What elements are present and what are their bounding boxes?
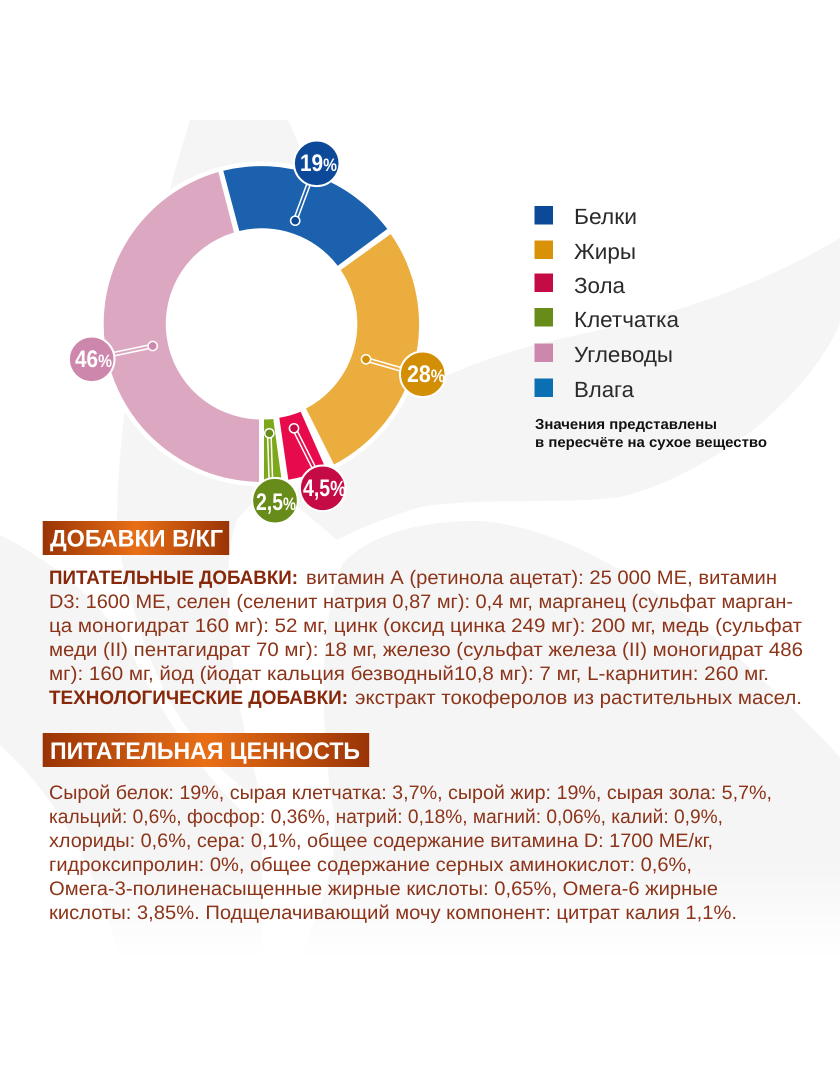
legend item: Углеводы: Углеводы xyxy=(574,342,673,367)
legend item: Зола: Зола xyxy=(574,273,626,298)
background swoosh shapes xyxy=(0,120,840,960)
callout: 46% xyxy=(69,336,157,382)
callout: 2,5%: 2,5% xyxy=(256,489,296,516)
text block: nutritional value: Сырой белок: 19%, сырая клетчатка: 3,7%, сырой жир: 19%, сырая зола: 5,7%, xyxy=(49,782,772,804)
text block: nutritional value: кислоты: 3,85%. Подщелачивающий мочу компонент: цитрат калия 1,1%. xyxy=(49,902,737,924)
legend item: Белки xyxy=(534,204,637,229)
text block: additives: меди (II) пентагидрат 70 мг): 18 мг, железо (сульфат железа (II) моногидрат 486 xyxy=(49,639,803,661)
text block: additives: мг): 160 мг, йод (йодат кальция безводный10,8 мг): 7 мг, L-карнитин: 260 мг. xyxy=(49,663,769,685)
callout: 2,5% xyxy=(252,429,298,524)
segment: Жиры xyxy=(306,234,419,464)
legend xyxy=(534,204,680,402)
segment: Зола xyxy=(279,412,326,480)
legend item: Зола xyxy=(534,273,626,298)
legend item: Белки: Белки xyxy=(574,204,637,229)
legend note: в пересчёте на сухое вещество xyxy=(535,435,767,451)
legend item: Жиры: Жиры xyxy=(574,239,636,264)
text block: nutritional value xyxy=(49,782,772,924)
text block: nutritional value: хлориды: 0,6%, сера: 0,1%, общее содержание витамина D: 1700 МЕ/кг, xyxy=(49,830,713,852)
text block: additives: ца моногидрат 160 мг): 52 мг, цинк (оксид цинка 249 мг): 200 мг, медь (сульфат xyxy=(49,615,802,637)
callout: 46%: 46% xyxy=(75,346,112,373)
text block: additives: D3: 1600 МЕ, селен (селенит натрия 0,87 мг): 0,4 мг, марганец (сульфат марган- xyxy=(49,591,793,613)
legend item: Клетчатка: Клетчатка xyxy=(574,307,680,332)
text block: additives xyxy=(49,567,803,709)
text block: additives: ТЕХНОЛОГИЧЕСКИЕ ДОБАВКИ: xyxy=(49,687,348,709)
heading: Добавки в/кг: ДОБАВКИ В/КГ xyxy=(50,526,223,552)
text block: additives: витамин А (ретинола ацетат): 25 000 МЕ, витамин xyxy=(306,567,777,589)
legend item: Влага: Влага xyxy=(574,377,635,402)
callout: 19% xyxy=(291,140,340,225)
text block: nutritional value: Омега-3-полиненасыщенные жирные кислоты: 0,65%, Омега-6 жирные xyxy=(49,878,718,900)
heading: Питательная ценность: ПИТАТЕЛЬНАЯ ЦЕННОСТЬ xyxy=(50,738,360,765)
donut chart xyxy=(69,140,446,524)
callout: 19%: 19% xyxy=(300,150,337,177)
legend note: Значения представлены xyxy=(535,417,717,433)
callout: 4,5% xyxy=(289,424,346,511)
legend item: Жиры xyxy=(534,239,636,264)
legend item: Влага xyxy=(534,377,635,402)
text block: nutritional value: кальций: 0,6%, фосфор: 0,36%, натрий: 0,18%, магний: 0,06%, калий: 0,9%, xyxy=(49,806,723,828)
text block: nutritional value: гидроксипролин: 0%, общее содержание серных аминокислот: 0,6%, xyxy=(49,854,692,876)
text block: additives: экстракт токоферолов из растительных масел. xyxy=(355,687,802,709)
segment: Углеводы xyxy=(104,172,259,482)
text block: additives: ПИТАТЕЛЬНЫЕ ДОБАВКИ: xyxy=(49,567,298,589)
callout: 28%: 28% xyxy=(407,361,445,388)
segment: Белки xyxy=(223,166,387,266)
callout: 28% xyxy=(361,352,446,397)
callout: 4,5%: 4,5% xyxy=(303,475,346,502)
legend note xyxy=(535,417,767,451)
segment: Клетчатка xyxy=(264,419,282,482)
